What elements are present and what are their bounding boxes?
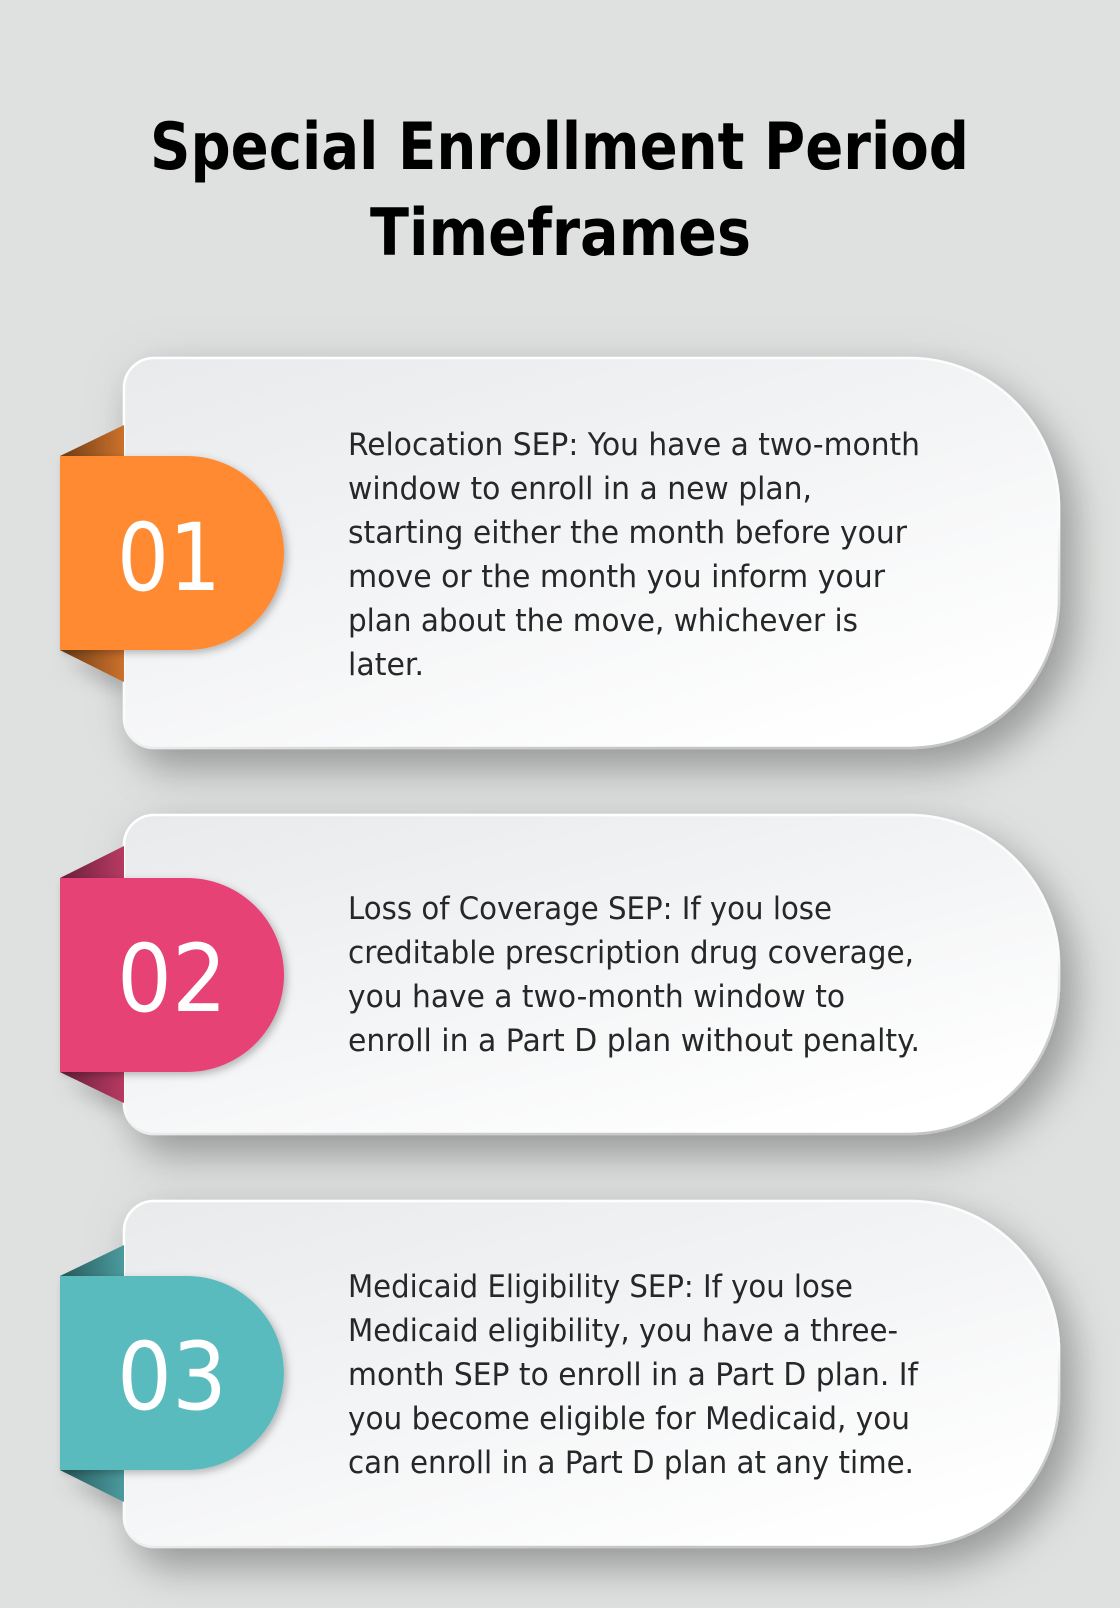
panel: step 02 loss of coverage xyxy=(60,815,1059,1134)
badge: 01 xyxy=(60,456,284,650)
text block: loss of coverage SEP xyxy=(348,891,920,1059)
fold: step 02 lower ribbon front xyxy=(60,1072,124,1103)
text block: loss of coverage SEP: Loss of Coverage SEP: If you lose xyxy=(348,891,832,927)
card: step 02 xyxy=(124,815,1059,1134)
fold: step 01 upper ribbon xyxy=(60,425,124,456)
fold: step 01 lower ribbon xyxy=(60,650,124,682)
text block: loss of coverage SEP: you have a two-month window to xyxy=(348,979,845,1015)
panel: step 03 medicaid eligibility xyxy=(60,1201,1059,1547)
text block: relocation SEP: later. xyxy=(348,647,424,683)
text block: medicaid eligibility SEP: Medicaid Eligibility SEP: If you lose xyxy=(348,1269,853,1305)
text block: loss of coverage SEP: creditable prescription drug coverage, xyxy=(348,935,914,971)
fold: step 02 upper ribbon xyxy=(60,846,124,878)
text block: relocation SEP xyxy=(348,427,920,683)
text block: relocation SEP: plan about the move, whichever is xyxy=(348,603,858,639)
text block: relocation SEP: window to enroll in a new plan, xyxy=(348,471,812,507)
title: Timeframes xyxy=(370,196,751,271)
badge: 02 xyxy=(60,878,284,1072)
card: step 01 xyxy=(124,358,1059,748)
badge: 02: 02 xyxy=(117,925,227,1034)
badge: 01: 01 xyxy=(117,504,221,613)
card: step 03 xyxy=(124,1201,1059,1547)
text block: medicaid eligibility SEP: you become eligible for Medicaid, you xyxy=(348,1401,910,1437)
fold: step 03 lower ribbon front xyxy=(60,1470,124,1502)
text block: medicaid eligibility SEP: Medicaid eligibility, you have a three- xyxy=(348,1313,898,1349)
text block: loss of coverage SEP: enroll in a Part D plan without penalty. xyxy=(348,1023,920,1059)
badge: 03 xyxy=(60,1276,284,1470)
fold: step 02 lower ribbon xyxy=(60,1072,124,1103)
title xyxy=(150,110,969,271)
fold: step 03 lower ribbon xyxy=(60,1470,124,1502)
text block: relocation SEP: starting either the month before your xyxy=(348,515,907,551)
panel: step 01 relocation xyxy=(60,358,1059,748)
fold: step 03 upper ribbon xyxy=(60,1245,124,1276)
text block: medicaid eligibility SEP: month SEP to enroll in a Part D plan. If xyxy=(348,1357,919,1393)
badge: 03: 03 xyxy=(117,1323,227,1432)
title: Special Enrollment Period xyxy=(150,110,969,185)
text block: medicaid eligibility SEP xyxy=(348,1269,919,1481)
text block: relocation SEP: move or the month you inform your xyxy=(348,559,885,595)
text block: medicaid eligibility SEP: can enroll in a Part D plan at any time. xyxy=(348,1445,914,1481)
text block: relocation SEP: Relocation SEP: You have a two-month xyxy=(348,427,920,463)
fold: step 01 lower ribbon front xyxy=(60,650,124,682)
